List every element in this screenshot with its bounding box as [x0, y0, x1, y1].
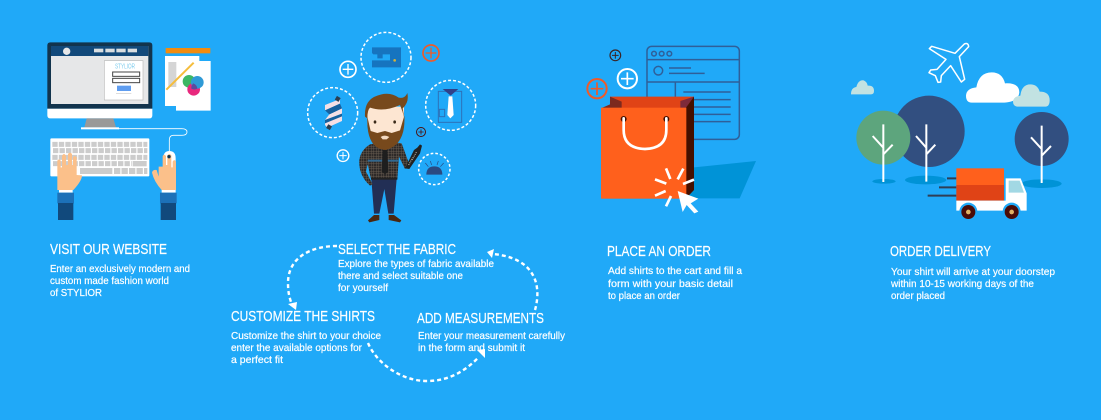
icon: small dark plus [416, 127, 425, 136]
description: order placed [891, 290, 945, 302]
description [890, 266, 1055, 302]
description: of STYLIOR [50, 287, 102, 299]
description: enter the available options for [231, 342, 362, 354]
icon: right cloud [1013, 84, 1050, 107]
description [608, 265, 742, 302]
icon: monitor stand and cable [81, 118, 187, 152]
heading: CUSTOMIZE THE SHIRTS [231, 308, 375, 325]
heading: SELECT THE FABRIC [338, 241, 456, 258]
character: bearded man [359, 93, 422, 222]
description: for yourself [338, 282, 388, 294]
icon: click cursor [655, 168, 698, 213]
icon: airplane [929, 44, 969, 82]
step: select the fabric [338, 241, 494, 294]
icon: left hand [57, 153, 82, 220]
eyes [374, 120, 376, 124]
torso with plaid shirt [359, 142, 409, 186]
tree: dark blue large [893, 96, 965, 182]
description: Enter your measurement carefully [418, 330, 566, 342]
icon: large cloud [966, 72, 1019, 103]
description [50, 263, 190, 299]
icon: shirt [426, 80, 476, 130]
heading: ADD MEASUREMENTS [417, 310, 544, 327]
icon: monitor [47, 42, 152, 118]
description: Explore the types of fabric available [338, 258, 494, 270]
shadow shape [688, 161, 756, 198]
tie [382, 150, 388, 174]
description: Add shirts to the cart and fill a [608, 265, 742, 277]
description: there and select suitable one [338, 270, 463, 282]
icon: browser window [647, 46, 739, 139]
step: visit our website [50, 241, 190, 299]
hair [365, 93, 408, 118]
description: Enter an exclusively modern and [50, 263, 190, 275]
description: a perfect fit [231, 354, 283, 366]
icon: small white plus [337, 150, 349, 161]
arrow: fabric to customize [288, 246, 337, 310]
icon: shopping bag [601, 97, 694, 199]
raised arm [405, 144, 422, 169]
icon: sewing machine [361, 32, 411, 82]
description [418, 330, 566, 354]
icon: orange plus [587, 79, 607, 98]
description: to place an order [608, 290, 680, 302]
heading: ORDER DELIVERY [890, 243, 991, 260]
icon: small cloud [851, 80, 874, 94]
description [338, 258, 494, 294]
icon: measuring tape [308, 88, 358, 138]
icon: monitor: STYLIOR [115, 64, 135, 71]
shoes [368, 215, 401, 222]
icon: mouse [163, 151, 176, 170]
beard [367, 116, 404, 150]
step: order delivery [890, 243, 1055, 302]
heading: VISIT OUR WEBSITE [50, 241, 167, 258]
icon: dark plus [610, 50, 621, 61]
illustration: shopping bag and browser window [587, 46, 756, 213]
description: in the form and submit it [418, 342, 525, 354]
icon: white plus large [340, 61, 356, 77]
step: add measurements [417, 310, 566, 354]
face [367, 107, 404, 140]
description: Customize the shirt to your choice [231, 330, 381, 342]
icon: design sheets with ruler and pencil [165, 48, 211, 111]
step: customize the shirts [231, 308, 381, 366]
heading: PLACE AN ORDER [607, 243, 711, 260]
icon: keyboard [50, 138, 149, 176]
bag handle [624, 118, 666, 149]
arrow: customize to measurements [368, 343, 485, 381]
step: place an order [607, 243, 742, 302]
legs [371, 179, 397, 214]
tree: green [856, 111, 910, 182]
illustration: computer with hands on keyboard [47, 42, 211, 220]
ground shadows [872, 179, 896, 184]
tree: dark blue right [1015, 112, 1069, 183]
icon: white plus [618, 69, 637, 88]
arrow: measurements to fabric [487, 249, 537, 310]
icon: pin cushion [419, 153, 450, 185]
description: Your shirt will arrive at your doorstep [891, 266, 1055, 278]
illustration: tailor character with icons [308, 32, 476, 222]
illustration: delivery scene [851, 44, 1069, 221]
icon: right hand [152, 154, 177, 220]
mouth [381, 136, 389, 139]
icon: delivery truck [928, 168, 1027, 221]
icon: orange plus [423, 45, 439, 61]
description: custom made fashion world [50, 275, 169, 287]
description: within 10-15 working days of the [890, 278, 1034, 290]
description [231, 330, 381, 366]
description: form with your basic detail [608, 278, 733, 290]
